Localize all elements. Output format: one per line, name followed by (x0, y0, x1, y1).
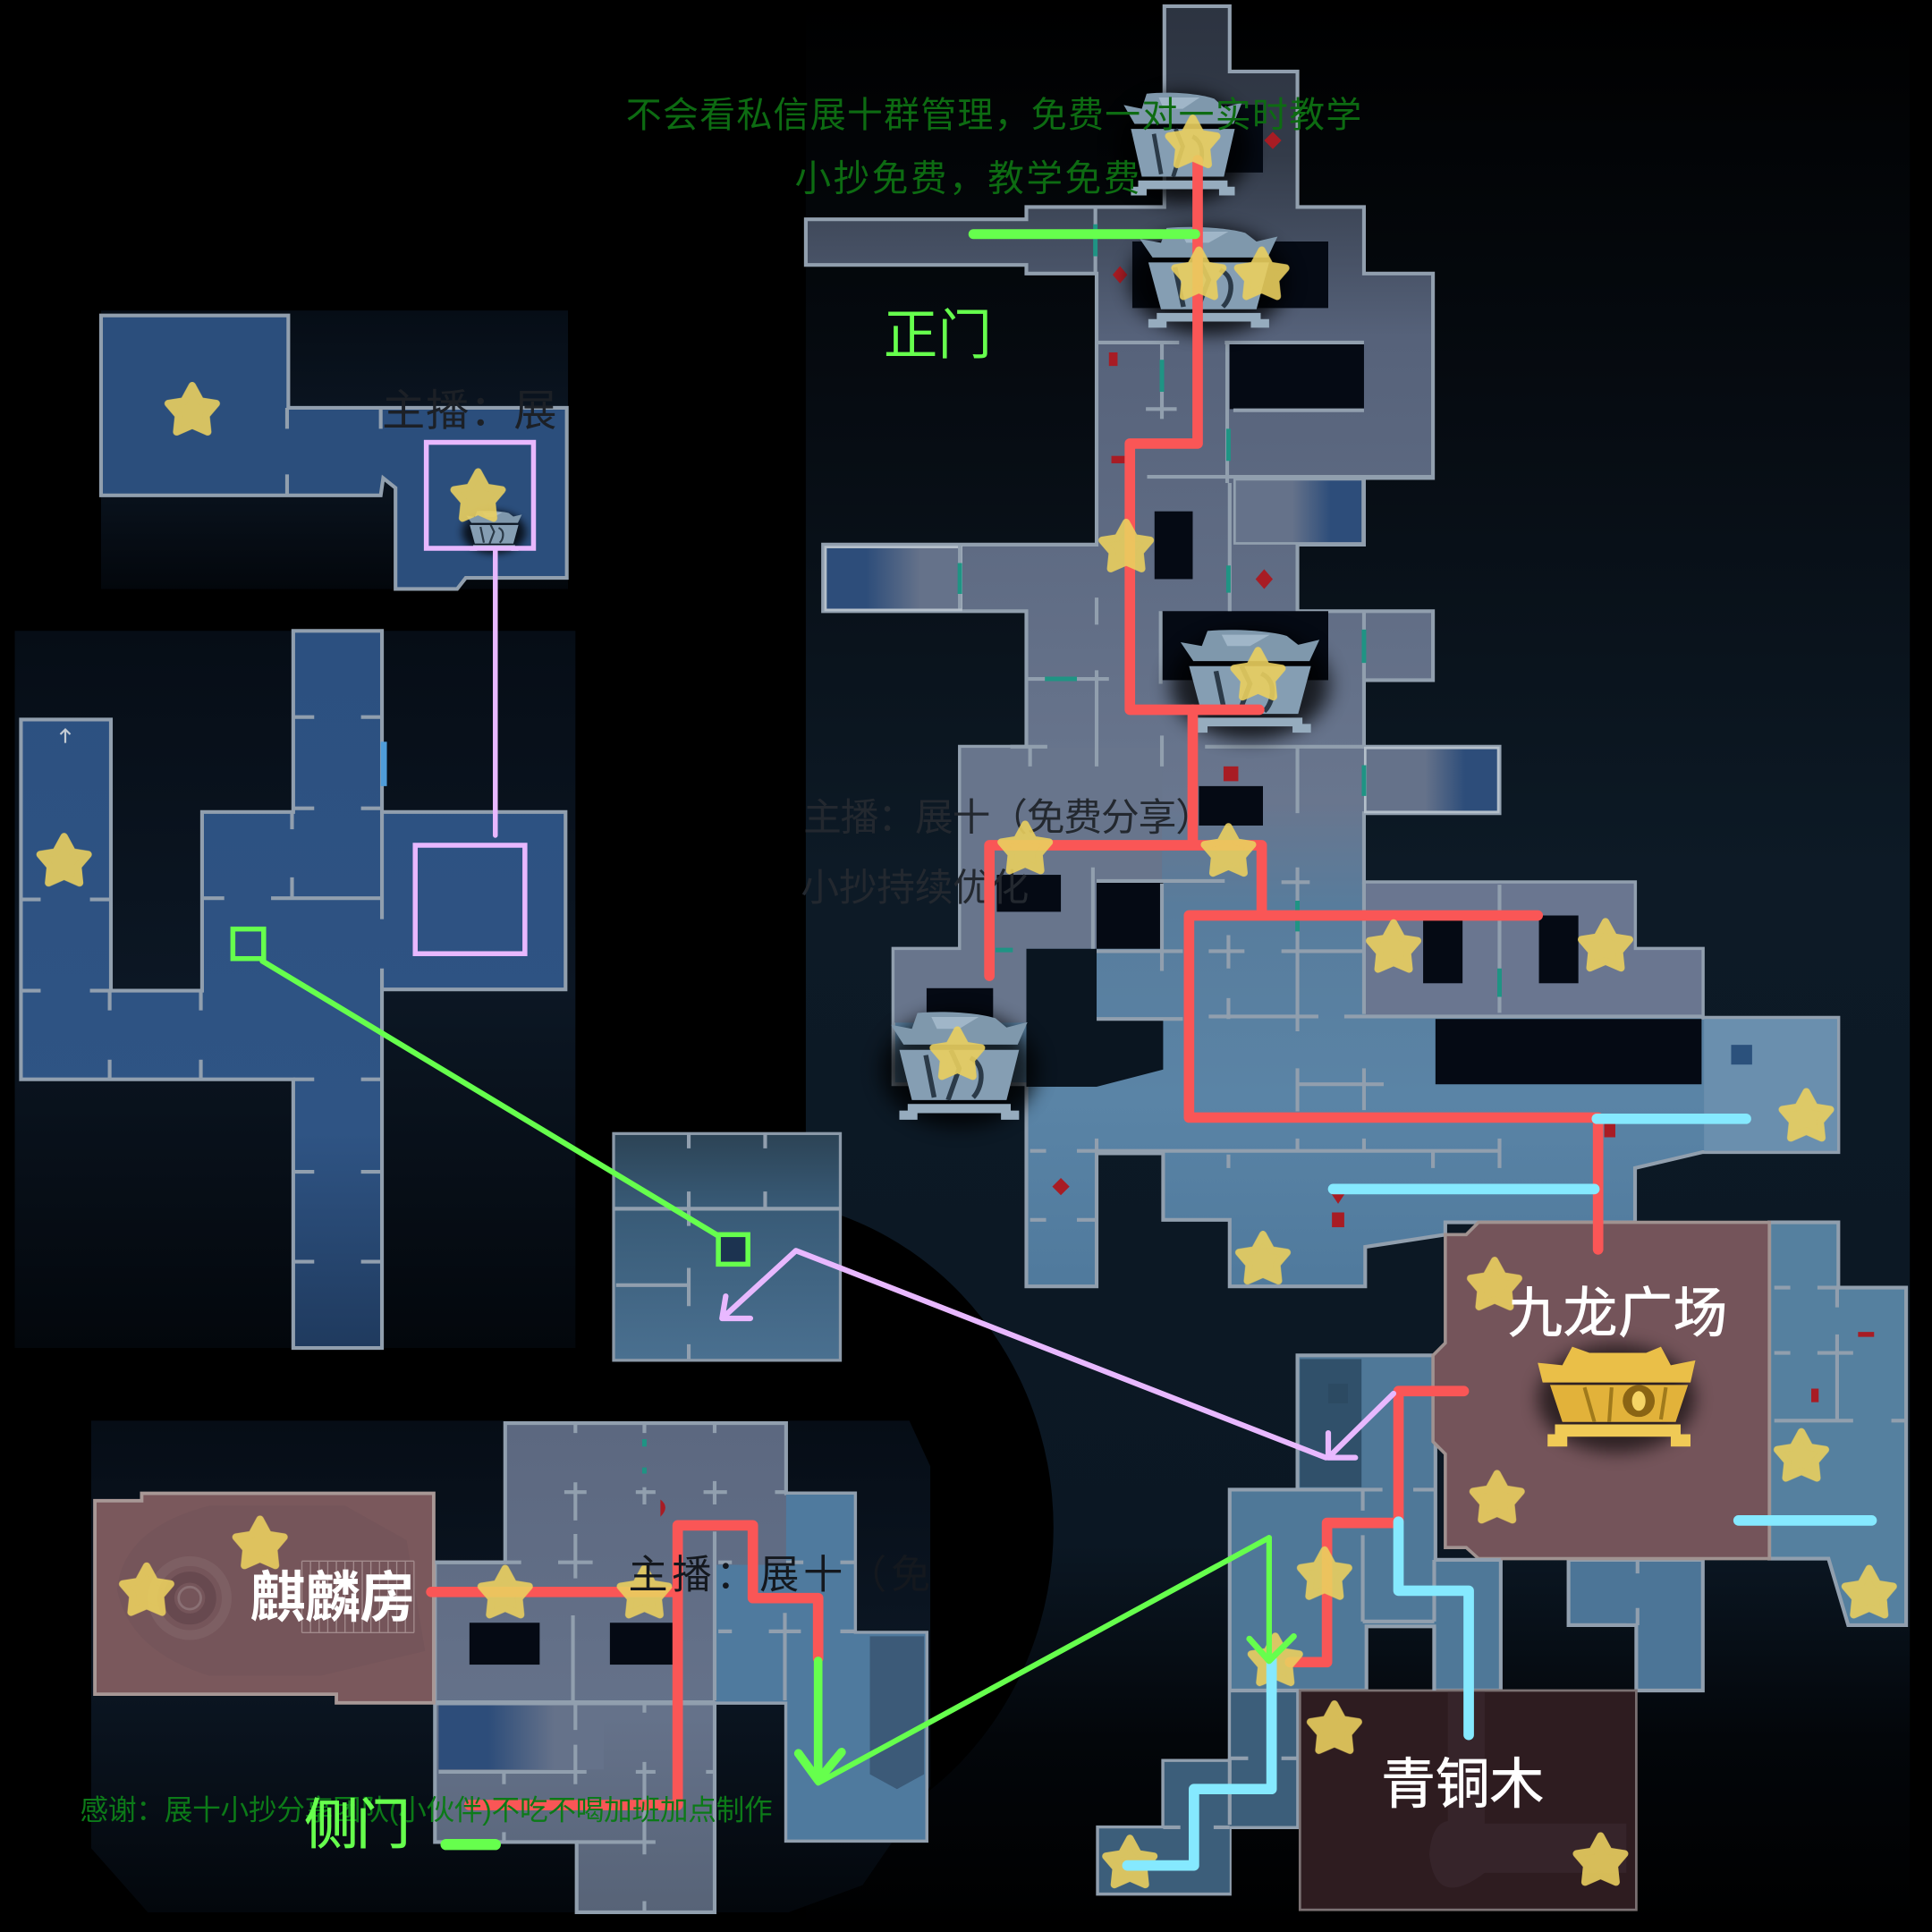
room east of plaza (1769, 1223, 1906, 1625)
blue door (381, 741, 387, 786)
deep blue room (438, 1706, 604, 1769)
star (1102, 522, 1150, 569)
star (1577, 1836, 1624, 1882)
star (1205, 826, 1252, 873)
star (1106, 1838, 1154, 1885)
icon: silver chest third (1171, 630, 1329, 741)
panel: main floor map (806, 6, 1838, 1286)
star (1369, 923, 1418, 969)
kylin room floor tone (117, 1505, 425, 1675)
upper left walls (287, 408, 381, 496)
rooms west of plaza (1097, 1355, 1501, 1894)
route: cyan bar middle (1334, 1185, 1595, 1193)
line: purple vertical link (494, 548, 497, 835)
lower corridor tone (1099, 1691, 1296, 1893)
arrow: green long link (818, 1538, 1269, 1783)
star (1001, 825, 1049, 870)
background: black circular cutout (425, 1198, 1054, 1858)
label: kylin room: 麒麟房 (250, 1567, 415, 1629)
star (1169, 118, 1216, 165)
kylin room (95, 1494, 434, 1703)
lighter east room (1704, 1019, 1837, 1151)
middle left floor (21, 631, 565, 1348)
grey west wing (894, 748, 1162, 1022)
interior walls (1163, 1288, 1906, 1827)
kylin room round mark (153, 1561, 226, 1635)
marker: green square room (718, 1234, 748, 1264)
blue end room west (826, 547, 961, 610)
room walls (614, 1133, 840, 1359)
star (1470, 1260, 1519, 1307)
text: green tutoring note line 1: 不会看私信展十群管理，免费一对一实时教学 (626, 96, 1361, 135)
arrow marker (61, 730, 71, 743)
room floor (614, 1133, 840, 1360)
walls (435, 1423, 855, 1912)
icon: silver chest second (1130, 226, 1287, 335)
annex marker (1328, 1384, 1348, 1403)
icons: red gems (660, 131, 1874, 1517)
star (481, 1569, 530, 1614)
bronze room floor tone (1429, 1691, 1626, 1887)
text: streamer watermark upper left: 主播：展 (382, 386, 557, 435)
icon: gold chest (1538, 1344, 1696, 1453)
text: thanks credit: 感谢：展十小抄分享团队(小伙伴)不吃不喝加班加点制作 (80, 1794, 773, 1826)
dark square (721, 1237, 747, 1263)
thick central wall (436, 1701, 715, 1705)
text: streamer watermark lower: 主播：展十（免 (629, 1554, 930, 1597)
text: watermark second line: 小抄持续优化 (801, 867, 1029, 910)
kylin room grate (302, 1561, 414, 1632)
star (40, 836, 88, 883)
text: streamer watermark centre: 主播：展十（免费分享） (803, 796, 1214, 839)
upper left floor (101, 316, 567, 589)
route: red branch middle (989, 709, 1262, 976)
interior walls (960, 207, 1701, 1220)
star (454, 472, 502, 518)
star (123, 1566, 171, 1613)
arrow: green head at star (1250, 1636, 1293, 1661)
darker stripe (870, 1636, 924, 1789)
main floor outline (806, 6, 1838, 1286)
teal doors (960, 225, 1499, 996)
blue end room east (1234, 479, 1363, 544)
panel: middle left map (21, 631, 565, 1348)
dark annex (1300, 1359, 1361, 1487)
route: green link between maps (262, 961, 718, 1236)
star (1174, 250, 1223, 296)
route: cyan bar upper (1597, 1115, 1746, 1123)
teal doors (643, 1439, 646, 1474)
wall openings and voids (927, 105, 1701, 1087)
arrow: green down to star (1267, 1538, 1271, 1657)
voids (470, 1623, 678, 1665)
route: red main path upper (1130, 160, 1259, 709)
route: red loop lower (1189, 916, 1598, 1250)
star (933, 1030, 981, 1076)
route: cyan path to bronze room (1399, 1521, 1469, 1735)
panel: lower left map (95, 1423, 927, 1912)
icon: silver chest left (881, 1012, 1038, 1128)
star (1783, 1092, 1830, 1138)
route: red path near plaza (1290, 1391, 1464, 1662)
bar: green side door marker (446, 1841, 496, 1849)
bronze room (1300, 1690, 1636, 1910)
arrow: purple near plaza (1328, 1394, 1394, 1458)
grey floor (435, 1423, 927, 1912)
marker square (1731, 1045, 1752, 1064)
star (1473, 1474, 1521, 1520)
blue end room southeast (1365, 748, 1498, 812)
room south of plaza (1569, 1560, 1703, 1690)
marker: purple square lower (415, 845, 525, 953)
background: middle left panel (15, 631, 575, 1348)
arrow: purple to room (722, 1250, 1326, 1458)
star (1238, 250, 1285, 296)
route: red path lower left (431, 1525, 818, 1805)
panel: small connecting room (614, 1133, 840, 1360)
background: upper left panel (101, 310, 568, 589)
route: cyan bar east (1739, 1517, 1871, 1524)
star (1239, 1234, 1287, 1281)
label: bronze wood: 青铜木 (1381, 1753, 1544, 1814)
label: side entrance: 侧门 (304, 1794, 411, 1855)
route: green entrance bar (973, 231, 1195, 238)
middle left walls (21, 717, 382, 1262)
icon: silver chest top (1115, 92, 1250, 203)
star (1234, 650, 1282, 697)
star (1845, 1569, 1894, 1614)
star (1251, 1636, 1300, 1682)
background: main map panel (806, 0, 1910, 1932)
arrow: green down lower left (799, 1661, 842, 1781)
label: nine dragon plaza: 九龙广场 (1508, 1283, 1727, 1343)
background: lower left panel (91, 1420, 930, 1912)
star (621, 1569, 668, 1614)
grey east wing (1365, 884, 1701, 1015)
panel: upper left map (101, 316, 567, 589)
blue rooms (715, 1495, 926, 1840)
star (1310, 1704, 1359, 1750)
star (1581, 921, 1630, 968)
star (1777, 1432, 1826, 1478)
plaza room (1433, 1223, 1769, 1559)
label: main entrance: 正门 (884, 304, 992, 365)
text: green tutoring note line 2: 小抄免费，教学免费 (795, 158, 1140, 199)
marker: green square left (233, 929, 264, 959)
star (236, 1520, 284, 1565)
marker: purple square upper (427, 443, 533, 548)
icon: small silver chest (462, 511, 526, 554)
route: cyan path southwest (1127, 1660, 1272, 1866)
panel: eastern rooms (1097, 1223, 1906, 1910)
star (168, 386, 216, 432)
star (1301, 1550, 1349, 1597)
